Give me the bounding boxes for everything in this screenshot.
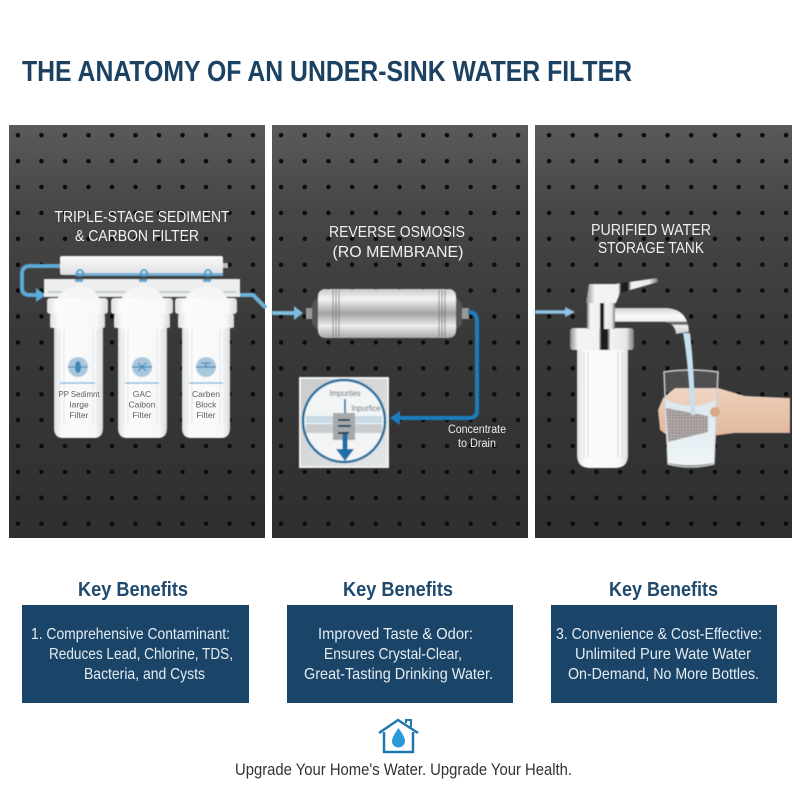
inset: membrane detail: Impurties [330, 388, 360, 398]
benefit box 1 [22, 605, 249, 703]
heading: RO membrane [329, 224, 465, 261]
filter assembly [22, 256, 266, 438]
benefit box 3: Unlimited Pure Wate Water [575, 646, 752, 663]
filter 3 [175, 270, 237, 438]
label: concentrate to drain: Concentrate [448, 424, 506, 436]
benefit box 3: 3. Convenience & Cost-Effective: [556, 626, 762, 643]
heading: RO membrane: (RO MEMBRANE) [332, 244, 464, 261]
label: concentrate to drain [448, 424, 506, 450]
label: concentrate to drain: to Drain [458, 438, 496, 450]
filter labels [58, 389, 220, 420]
heading: storage tank [591, 222, 711, 257]
benefit box 2: Ensures Crystal-Clear, [324, 646, 462, 663]
heading: RO membrane: REVERSE OSMOSIS [329, 224, 465, 241]
heading: storage tank: PURIFIED WATER [591, 222, 711, 239]
outlet pipe [238, 295, 266, 308]
heading: storage tank: STORAGE TANK [598, 240, 704, 257]
benefit heading 3: Key Benefits [609, 579, 718, 601]
filter labels: Filter [133, 410, 152, 420]
filter labels: Caibon [129, 400, 156, 410]
benefit box 2 [287, 605, 513, 703]
panel: triple-stage filter [9, 125, 266, 538]
filter labels: Filter [197, 410, 216, 420]
benefit box 1: 1. Comprehensive Contaminant: [31, 626, 230, 643]
benefit box 1: Reduces Lead, Chlorine, TDS, [49, 646, 233, 663]
icon: house with water drop [379, 720, 418, 752]
benefit box 2: Great-Tasting Drinking Water. [304, 666, 493, 683]
arrow: into membrane [272, 306, 303, 320]
title: THE ANATOMY OF AN UNDER-SINK WATER FILTER [22, 56, 632, 88]
filter labels: GAC [133, 389, 151, 399]
panel: reverse osmosis [272, 125, 528, 538]
filter labels: Block [196, 400, 217, 410]
membrane cylinder [306, 289, 469, 338]
benefit box 1: Bacteria, and Cysts [84, 666, 205, 683]
heading: triple-stage: TRIPLE-STAGE SEDIMENT [54, 209, 230, 226]
benefit heading 2: Key Benefits [343, 579, 453, 601]
panel: storage tank [535, 125, 792, 538]
filter labels: Iarge [69, 400, 89, 410]
bracket [44, 279, 240, 297]
filter labels: Carben [192, 389, 220, 399]
benefit box 3 [551, 605, 777, 703]
benefit heading 1: Key Benefits [78, 579, 188, 601]
filter 2 [111, 270, 173, 438]
benefit box 3: On-Demand, No More Bottles. [568, 666, 759, 683]
benefit box 2: Improved Taste & Odor: [318, 626, 473, 643]
filter labels: PP Sedimnt [58, 389, 100, 399]
heading: triple-stage: & CARBON FILTER [75, 228, 199, 245]
inset: membrane detail: Inpurfice [352, 404, 381, 413]
arrow: into tank [535, 307, 575, 317]
tank and faucet [570, 278, 689, 468]
hand and glass [658, 333, 790, 467]
inlet pipe [22, 266, 60, 295]
manifold [60, 256, 223, 275]
inset: membrane detail [300, 378, 388, 467]
arrow: concentrate pipe [390, 312, 477, 425]
filter 1 [47, 270, 108, 438]
heading: triple-stage [54, 209, 230, 245]
filter labels: Filter [70, 410, 89, 420]
footer tagline: Upgrade Your Home's Water. Upgrade Your Health. [235, 760, 572, 779]
